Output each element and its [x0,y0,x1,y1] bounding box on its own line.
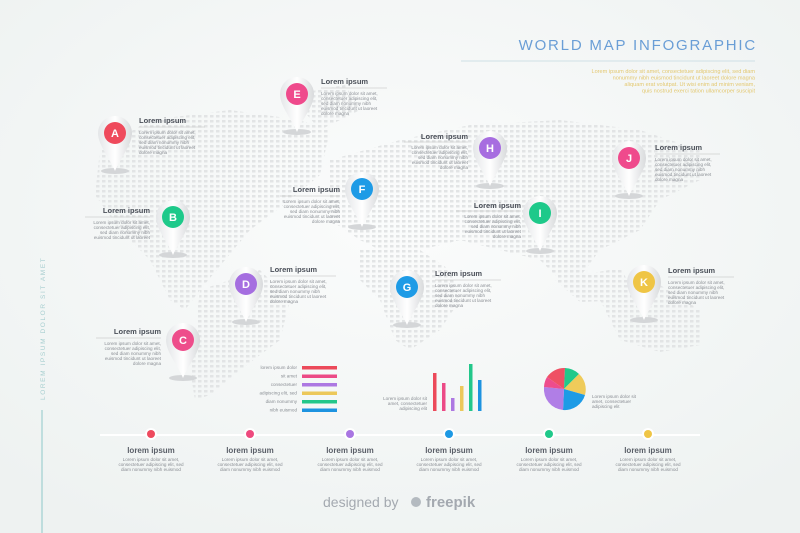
text D [270,265,336,304]
text G: sed diam nonummy nibh [435,293,485,298]
pin D: D [242,279,250,291]
text A: consectetuer adipiscing elit, [139,135,195,140]
text C: sed diam nonummy nibh [111,351,161,356]
timeline: diam nonummy nibh euismod [220,467,280,472]
pin B: B [169,212,177,224]
column chart [383,364,482,411]
text E [321,77,387,116]
text A: Lorem ipsum dolor sit amet, [139,130,196,135]
text D: dolore magna [270,299,299,304]
text F: sed diam nonummy nibh [290,209,340,214]
text K: consectetuer adipiscing elit, [668,285,724,290]
text G: dolore magna [435,303,464,308]
text B: sed diam nonummy nibh [100,230,150,235]
text A: Lorem ipsum [139,116,186,125]
pin I: I [538,208,542,220]
text J: sed diam nonummy nibh [655,167,705,172]
title: WORLD MAP INFOGRAPHIC [519,37,757,54]
text D: Lorem ipsum [270,265,317,274]
pin D [229,267,263,325]
footer credit [323,494,476,511]
pin H: H [486,143,494,155]
pin G [390,270,424,328]
column chart: adipiscing elit [399,406,428,411]
text I: euismod tincidunt ut laoreet [465,229,522,234]
pin J: J [626,153,632,165]
timeline: Lorem ipsum dolor sit amet, [322,457,378,462]
text C: Lorem ipsum dolor sit amet, [104,341,161,346]
footer credit: freepik [426,494,476,511]
timeline: Lorem ipsum dolor sit amet, [521,457,577,462]
text I: consectetuer adipiscing elit, [465,219,521,224]
pin H [473,131,507,189]
text A [139,116,205,155]
timeline: lorem ipsum [326,446,374,455]
text K: sed diam nonummy nibh [668,290,718,295]
timeline: diam nonummy nibh euismod [519,467,579,472]
text D: sed diam nonummy nibh [270,289,320,294]
timeline: lorem ipsum [425,446,473,455]
text G [435,269,501,308]
text B: Lorem ipsum [103,206,150,215]
timeline: lorem ipsum [127,446,175,455]
timeline [100,428,700,472]
pin F [345,172,379,230]
pin B [156,200,190,258]
timeline: diam nonummy nibh euismod [419,467,479,472]
text E: Lorem ipsum dolor sit amet, [321,91,378,96]
vertical side text: LOREM IPSUM DOLOR SIT AMET [40,257,47,400]
horizontal bar chart: sit amet [281,374,298,378]
horizontal bar chart [259,365,337,412]
pin C: C [179,335,187,347]
timeline: diam nonummy nibh euismod [320,467,380,472]
text F: euismod tincidunt ut laoreet [284,214,341,219]
timeline: Lorem ipsum dolor sit amet, [222,457,278,462]
text J [655,143,720,182]
text J: Lorem ipsum dolor sit amet, [655,157,712,162]
text H: Lorem ipsum [421,132,468,141]
pin C [166,323,200,381]
text E: consectetuer adipiscing elit, [321,96,377,101]
text E: euismod tincidunt ut laoreet [321,106,378,111]
text B: consectetuer adipiscing elit, [94,225,150,230]
text B: Lorem ipsum dolor sit amet, [93,220,150,225]
timeline: Lorem ipsum dolor sit amet, [421,457,477,462]
text J: Lorem ipsum [655,143,702,152]
timeline: consectetuer adipiscing elit, sed [118,462,184,467]
text H: euismod tincidunt ut laoreet [412,160,469,165]
timeline: Lorem ipsum dolor sit amet, [123,457,179,462]
horizontal bar chart: nibh euismod [270,408,297,412]
text B [85,206,151,240]
text H: dolore magna [440,165,468,170]
text D: Lorem ipsum dolor sit amet, [270,279,327,284]
text I: Lorem ipsum [474,201,521,210]
text F: consectetuer adipiscing elit, [284,204,340,209]
horizontal bar chart: diam nonummy [266,399,298,404]
text A: dolore magna [139,150,168,155]
timeline: consectetuer adipiscing elit, sed [615,462,681,467]
text E: dolore magna [321,111,350,116]
pin G: G [403,282,411,294]
text H: consectetuer adipiscing elit, [412,150,468,155]
timeline: consectetuer adipiscing elit, sed [516,462,582,467]
text K: euismod tincidunt ut laoreet [668,295,725,300]
text F: Lorem ipsum [293,185,340,194]
timeline: diam nonummy nibh euismod [618,467,678,472]
column chart: amet, consectetuer [388,401,427,406]
pie text: amet, consectetuer [592,399,632,404]
intro text: Lorem ipsum dolor sit amet, consectetuer adipiscing elit, sed diam [591,69,755,75]
text K [668,266,734,305]
pin A [98,116,132,174]
text E: sed diam nonummy nibh [321,101,371,106]
pin A: A [111,128,119,140]
timeline: consectetuer adipiscing elit, sed [317,462,383,467]
pin J [612,141,646,199]
text E: Lorem ipsum [321,77,368,86]
timeline: diam nonummy nibh euismod [121,467,181,472]
horizontal bar chart: adipiscing elit, sed [259,390,297,396]
pin E [280,77,314,135]
text F: Lorem ipsum dolor sit amet, [283,199,340,204]
text C: Lorem ipsum [114,327,161,336]
text A: sed diam nonummy nibh [139,140,189,145]
text K: Lorem ipsum [668,266,715,275]
text F [280,185,341,224]
text G: Lorem ipsum dolor sit amet, [435,283,492,288]
timeline: lorem ipsum [525,446,573,455]
text J: euismod tincidunt ut laoreet [655,172,712,177]
timeline: consectetuer adipiscing elit, sed [416,462,482,467]
text I: dolore magna [493,234,521,239]
pie text: adipiscing elit [592,404,620,409]
pin E: E [293,89,301,101]
text G: consectetuer adipiscing elit, [435,288,491,293]
text B: euismod tincidunt ut laoreet [94,235,151,240]
column chart: Lorem ipsum dolor sit [383,396,428,401]
horizontal bar chart: consectetuer [271,382,297,387]
text H: Lorem ipsum dolor sit amet, [411,145,468,150]
text C: dolore magna [133,361,161,366]
pin I [523,196,557,254]
intro text [591,69,756,94]
text G: Lorem ipsum [435,269,482,278]
text F: dolore magna [312,219,340,224]
pin K [627,265,661,323]
timeline: Lorem ipsum dolor sit amet, [620,457,676,462]
pie chart [544,368,586,410]
text I: sed diam nonummy nibh [471,224,521,229]
horizontal bar chart: lorem ipsum dolor [260,365,297,370]
text H [404,132,469,170]
text H: sed diam nonummy nibh [418,155,468,160]
pie text [592,394,637,409]
text C: consectetuer adipiscing elit, [105,346,161,351]
pie text: Lorem ipsum dolor sit [592,394,637,399]
intro text: quis nostrud exerci tation ullamcorper suscipit [642,88,755,94]
timeline: lorem ipsum [226,446,274,455]
text I: Lorem ipsum dolor sit amet, [464,214,521,219]
text K: dolore magna [668,300,697,305]
pin K: K [640,277,648,289]
timeline: consectetuer adipiscing elit, sed [217,462,283,467]
timeline: lorem ipsum [624,446,672,455]
text A: euismod tincidunt ut laoreet [139,145,196,150]
text J: consectetuer adipiscing elit, [655,162,711,167]
intro text: aliquam erat volutpat. Ut wisi enim ad minim veniam, [624,82,755,88]
text I [456,201,522,239]
text D: euismod tincidunt ut laoreet [270,294,327,299]
text J: dolore magna [655,177,684,182]
pin F: F [359,184,366,196]
footer credit: designed by [323,494,399,510]
text C: euismod tincidunt ut laoreet [105,356,162,361]
text C [96,327,162,366]
text K: Lorem ipsum dolor sit amet, [668,280,725,285]
text G: euismod tincidunt ut laoreet [435,298,492,303]
text D: consectetuer adipiscing elit, [270,284,326,289]
intro text: nonummy nibh euismod tincidunt ut laoreet dolore magna [613,76,756,82]
world dot map [96,85,700,398]
